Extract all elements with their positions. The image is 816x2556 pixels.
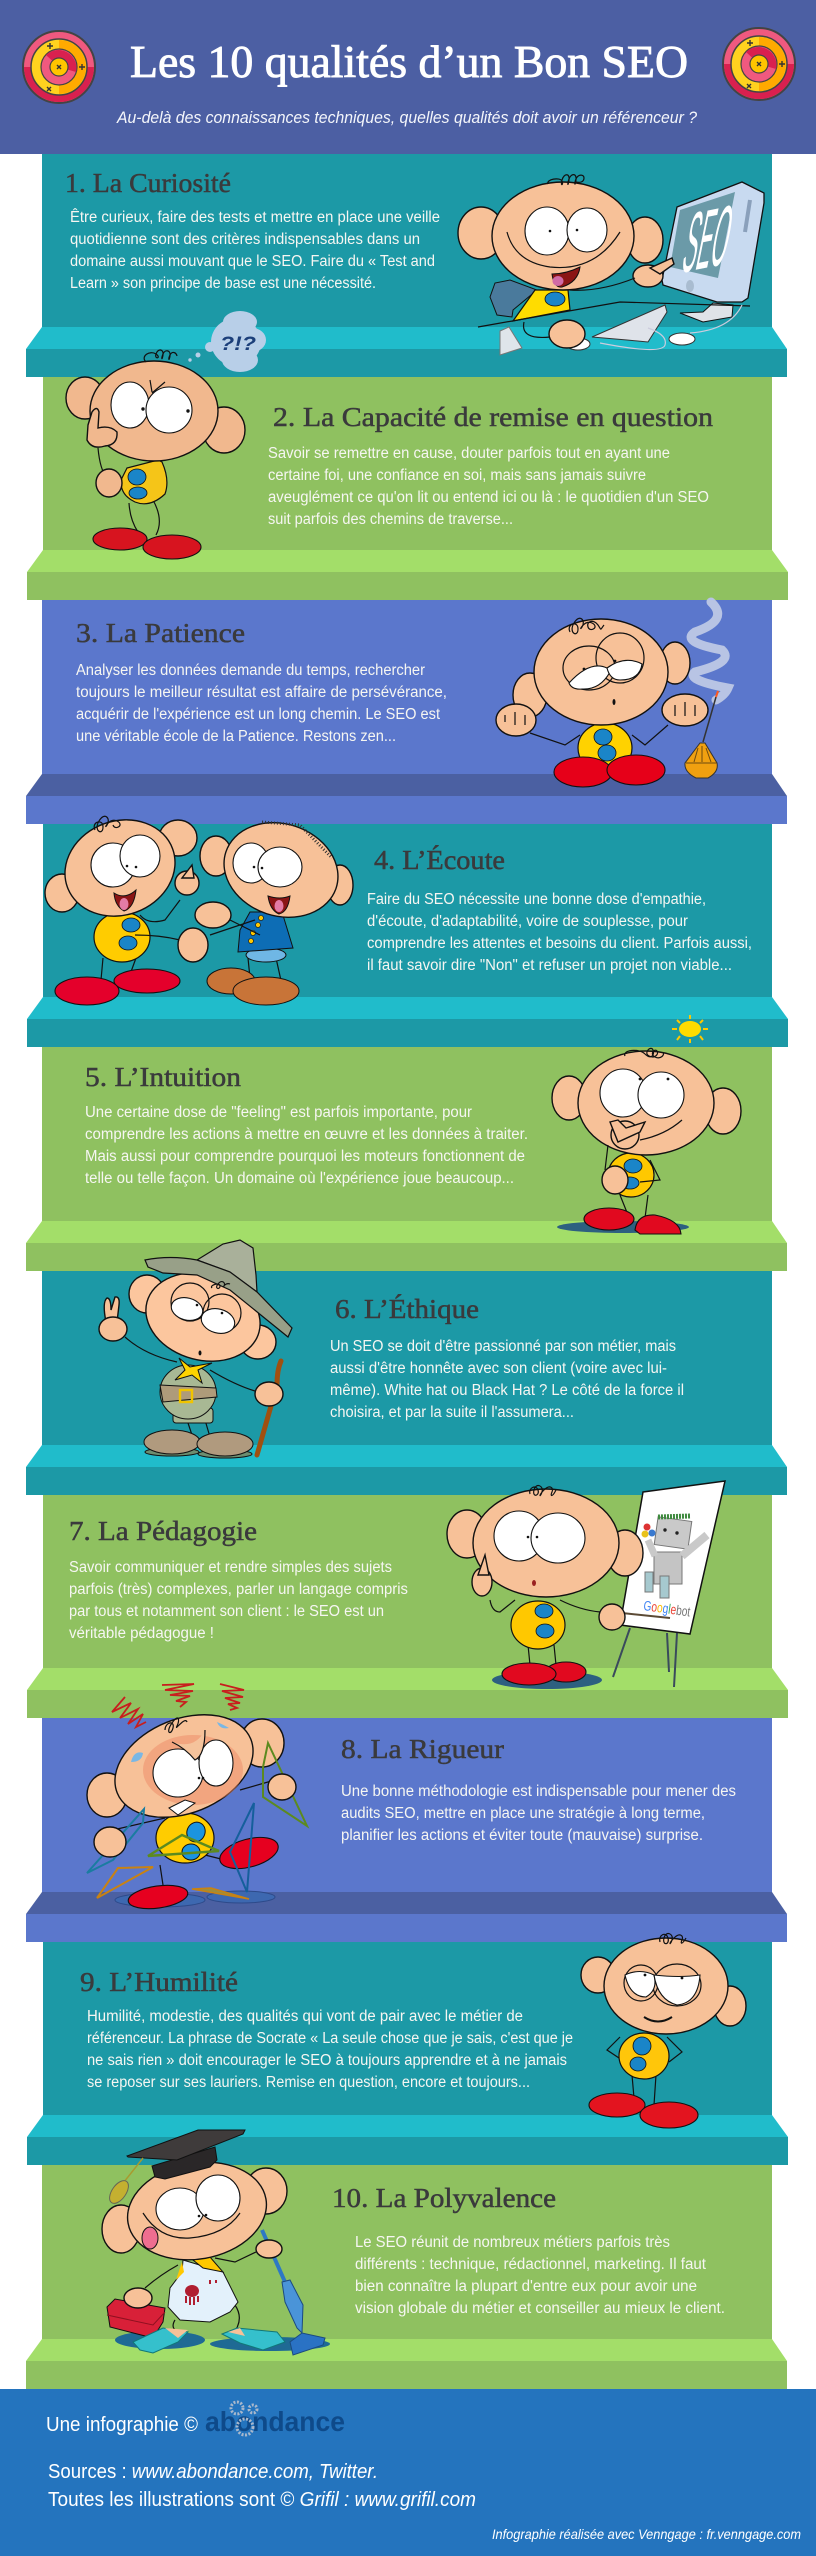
footer — [0, 2389, 816, 2556]
header band — [0, 0, 816, 154]
text block 2: Savoir se remettre en cause, douter parfois tout en ayant une — [268, 445, 670, 462]
illustration: two characters talking — [45, 805, 353, 1005]
illustration: scout character — [99, 1240, 292, 1458]
text block 4: il faut savoir dire "Non" et refuser un projet non viable... — [367, 957, 732, 974]
illustration: character with idea and sun — [552, 1015, 741, 1234]
text block 1: Être curieux, faire des tests et mettre en place une veille — [70, 209, 440, 226]
panel: 8 La Rigueur — [26, 1684, 787, 1942]
text block 8: Une bonne méthodologie est indispensable pour mener des — [341, 1783, 736, 1800]
illustration: graduate character with tools — [102, 2130, 330, 2355]
illustration: modest character — [581, 1934, 746, 2128]
text block 6: aussi d'être honnête avec son client (voire avec lui- — [330, 1360, 667, 1377]
text block 3 — [76, 662, 447, 745]
text block 5: Une certaine dose de "feeling" est parfois importante, pour — [85, 1104, 472, 1121]
heading 9: 9. L’Humilité — [80, 1967, 238, 1997]
text block 8: planifier les actions et éviter toute (mauvaise) surprise. — [341, 1827, 703, 1844]
panel: 7 La Pédagogie — [27, 1481, 788, 1718]
text block 4 — [367, 891, 752, 974]
illustration: thinking character with thought bubble: ?!? — [220, 334, 256, 355]
panel: 1 La Curiosité — [26, 154, 787, 377]
heading 10: 10. La Polyvalence — [332, 2183, 556, 2213]
text block 10: vision globale du métier et conseiller au mieux le client. — [355, 2300, 725, 2317]
subtitle: Au-delà des connaissances techniques, quelles qualités doit avoir un référenceur ? — [116, 108, 698, 127]
text block 9: ne sais rien » doit encourager le SEO à toujours apprendre et à ne jamais — [87, 2052, 567, 2069]
text block 7: véritable pédagogue ! — [69, 1625, 214, 1642]
panel: 3 La Patience — [26, 600, 787, 824]
text block 1 — [70, 209, 440, 292]
illustration: stressed character with hangers — [87, 1684, 307, 1912]
text block 3: une véritable école de la Patience. Restons zen... — [76, 728, 396, 745]
heading 4: 4. L’Écoute — [374, 845, 505, 875]
text block 6 — [330, 1338, 684, 1421]
heading 5: 5. L’Intuition — [85, 1062, 242, 1092]
illustration: meditating character with incense — [496, 602, 728, 787]
heading 3: 3. La Patience — [76, 618, 245, 648]
text block 3: toujours le meilleur résultat est affaire de persévérance, — [76, 684, 447, 701]
text block 4: Faire du SEO nécessite une bonne dose d'empathie, — [367, 891, 706, 908]
text block 10 — [355, 2234, 725, 2317]
text block 4: comprendre les attentes et besoins du client. Parfois aussi, — [367, 935, 752, 952]
text block 7 — [69, 1559, 408, 1642]
text block 2: aveuglément ce qu'on lit ou entend ici ou là : le quotidien d'un SEO — [268, 489, 709, 506]
text block 6: Un SEO se doit d'être passionné par son métier, mais — [330, 1338, 676, 1355]
panel: 9 L'Humilité — [27, 1934, 788, 2165]
text block 7: parfois (très) complexes, parler un langage compris — [69, 1581, 408, 1598]
text block 7: Savoir communiquer et rendre simples des sujets — [69, 1559, 392, 1576]
illustrations credit: Toutes les illustrations sont © Grifil : www.grifil.com — [48, 2489, 476, 2511]
text block 10: différents : technique, rédactionnel, marketing. Il faut — [355, 2256, 707, 2273]
text block 3: acquérir de l'expérience est un long chemin. Le SEO est — [76, 706, 441, 723]
abondance logo: abondance — [205, 2406, 345, 2437]
panel: 4 L'Écoute — [27, 805, 788, 1047]
text block 9: Humilité, modestie, des qualités qui vont de pair avec le métier de — [87, 2008, 523, 2025]
illustration: thinking character with thought bubble — [66, 311, 266, 559]
text block 5: telle ou telle façon. Un domaine où l'expérience joue beaucoup... — [85, 1170, 514, 1187]
sources: Sources : www.abondance.com, Twitter. — [48, 2461, 378, 2483]
text block 7: par tous et notamment son client : le SEO est un — [69, 1603, 384, 1620]
illustration: character presenting Googlebot board — [447, 1481, 725, 1689]
text block 8: audits SEO, mettre en place une stratégie à long terme, — [341, 1805, 705, 1822]
text block 9: se reposer sur ses lauriers. Remise en question, encore et toujours... — [87, 2074, 530, 2091]
text block 8 — [341, 1783, 736, 1844]
text block 4: d'écoute, d'adaptabilité, voire de souplesse, pour — [367, 913, 688, 930]
text block 6: même). White hat ou Black Hat ? Le côté de la force il — [330, 1382, 684, 1399]
heading 6: 6. L’Éthique — [335, 1294, 479, 1324]
text block 5 — [85, 1104, 528, 1187]
text block 1: domaine aussi mouvant que le SEO. Faire du « Test and — [70, 253, 435, 270]
text block 5: comprendre les actions à mettre en œuvre et les données à traiter. — [85, 1126, 528, 1143]
panel: 6 L'Éthique — [26, 1240, 787, 1495]
text block 2: suit parfois des chemins de traverse... — [268, 511, 513, 528]
illustration: character at computer: SEO — [676, 186, 740, 292]
heading 2: 2. La Capacité de remise en question — [273, 402, 714, 432]
text block 6: choisira, et par la suite il l'assumera... — [330, 1404, 574, 1421]
panel: 10 La Polyvalence — [26, 2130, 787, 2389]
illustration: character presenting Googlebot board: Googlebot — [643, 1598, 692, 1620]
illustration: character at computer — [458, 175, 764, 355]
credit line: Une infographie © — [46, 2414, 198, 2436]
Googlebot drawing — [642, 1516, 707, 1598]
panel: 5 L'Intuition — [26, 1015, 787, 1271]
icon: target left — [23, 31, 95, 103]
text block 10: Le SEO réunit de nombreux métiers parfois très — [355, 2234, 670, 2251]
text block 2 — [268, 445, 709, 528]
title: Les 10 qualités d’un Bon SEO — [130, 37, 688, 87]
text block 1: Learn » son principe de base est une nécessité. — [70, 275, 376, 292]
text block 10: bien connaître la plupart d'entre eux pour avoir une — [355, 2278, 697, 2295]
text block 2: certaine foi, une confiance en soi, mais sans jamais suivre — [268, 467, 646, 484]
icon: target right — [723, 28, 795, 100]
text block 3: Analyser les données demande du temps, rechercher — [76, 662, 425, 679]
text block 1: quotidienne sont des critères indispensables dans un — [70, 231, 420, 248]
heading 8: 8. La Rigueur — [341, 1734, 504, 1764]
panel: 2 La Capacité de remise en question — [27, 311, 788, 600]
heading 7: 7. La Pédagogie — [69, 1516, 257, 1546]
text block 9 — [87, 2008, 573, 2091]
text block 9: référenceur. La phrase de Socrate « La seule chose que je sais, c'est que je — [87, 2030, 573, 2047]
heading 1: 1. La Curiosité — [65, 168, 231, 198]
text block 5: Mais aussi pour comprendre pourquoi les moteurs fonctionnent de — [85, 1148, 525, 1165]
